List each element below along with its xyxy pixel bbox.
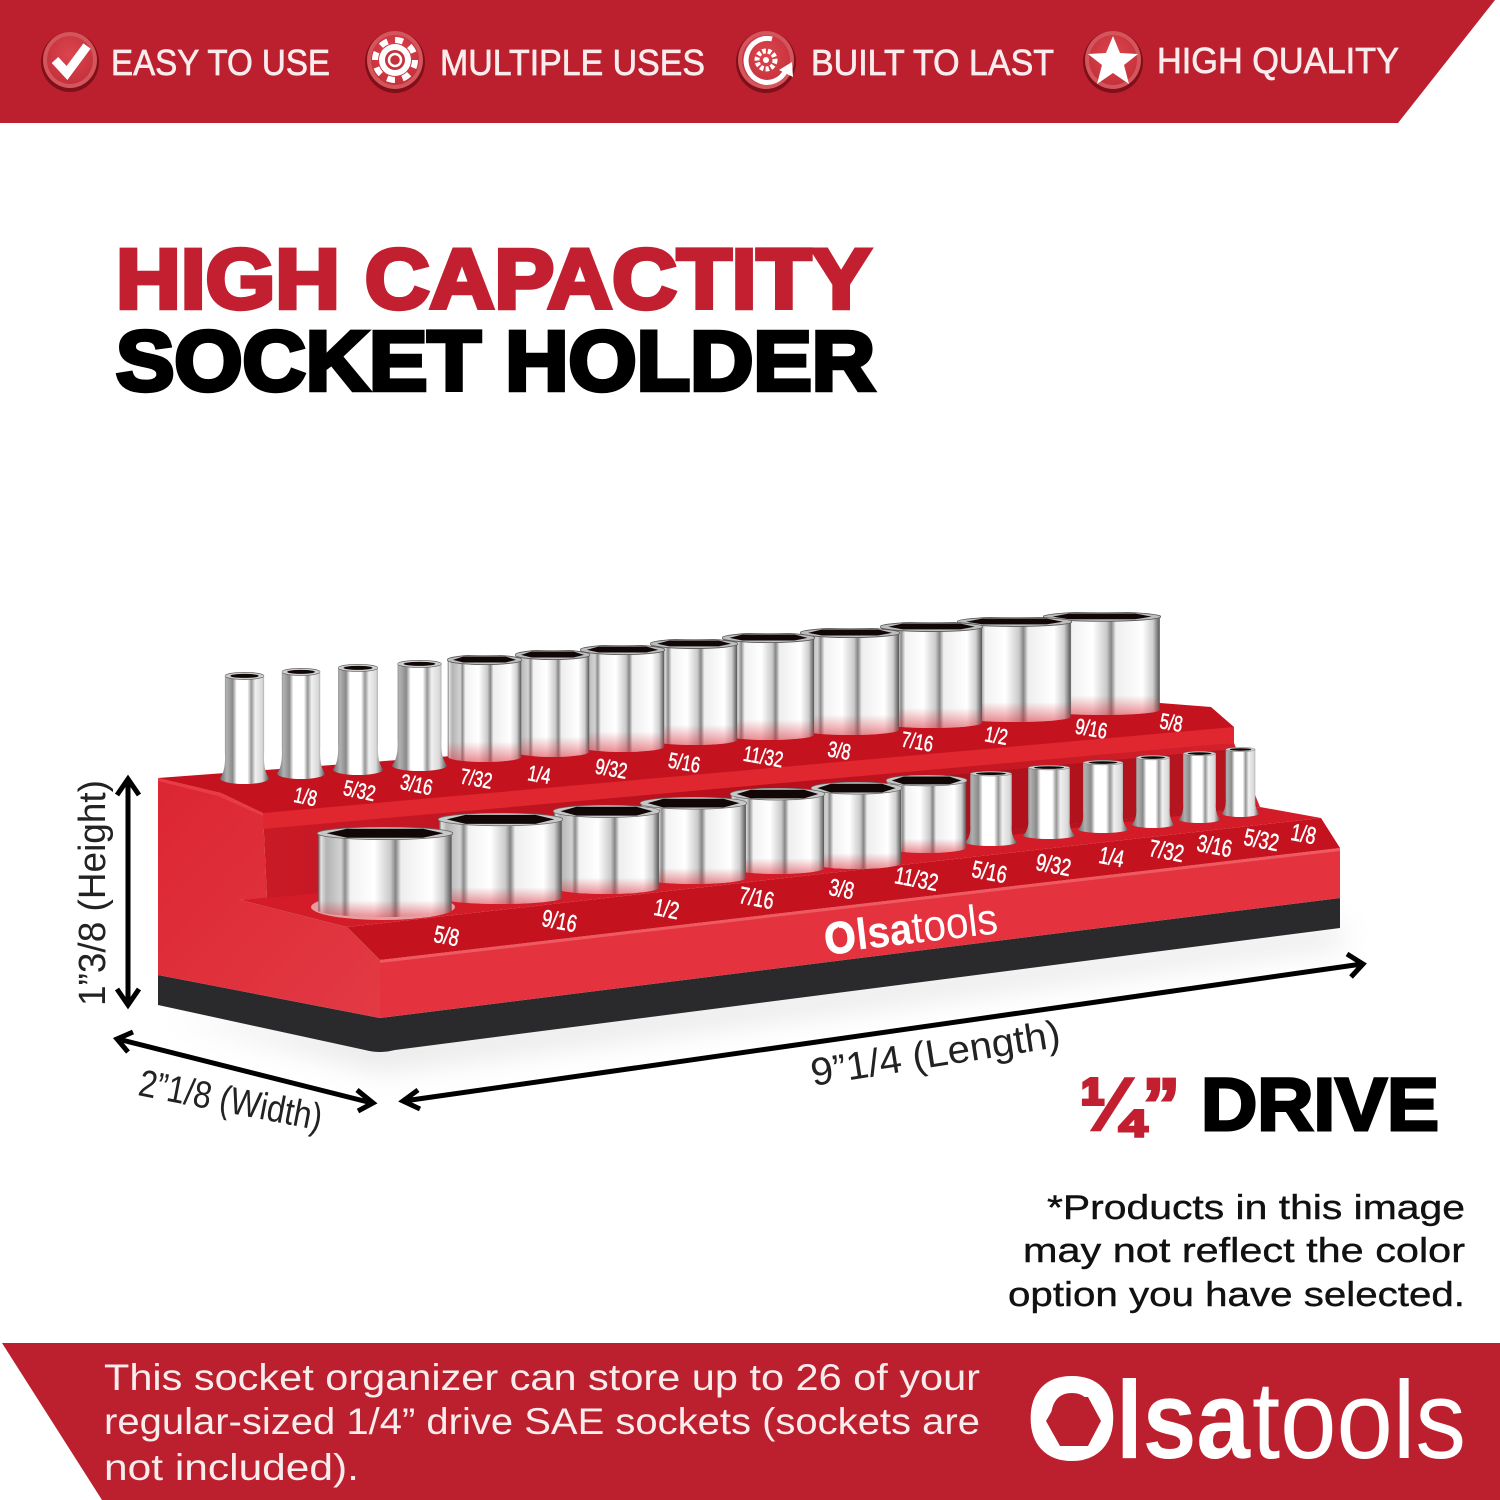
- brand logo: [1028, 1356, 1466, 1483]
- back row size labels: 5/16: [666, 748, 702, 778]
- back row size labels: 7/32: [458, 764, 494, 794]
- disclaimer note: [1008, 1189, 1465, 1314]
- icon: cycle badge: [736, 31, 796, 93]
- front row size labels: 5/32: [1242, 825, 1281, 857]
- front row size labels: 7/32: [1147, 836, 1186, 868]
- dimension: width: [117, 1032, 373, 1139]
- logo on holder: [822, 894, 1000, 964]
- back row size labels: 1/8: [292, 783, 319, 812]
- stepped wall: [263, 743, 1260, 898]
- back row size labels: 5/32: [341, 776, 378, 807]
- logo on holder: tools: [909, 894, 1000, 953]
- description text: regular-sized 1/4” drive SAE sockets (sockets are: [104, 1401, 980, 1442]
- back row size labels: 5/8: [1158, 709, 1185, 738]
- holder left face: [158, 778, 380, 1018]
- front row size labels: 5/8: [432, 922, 461, 952]
- title: SOCKET HOLDER: [116, 314, 875, 408]
- logo on holder: O: [822, 912, 858, 964]
- front row size labels: 11/32: [892, 863, 940, 897]
- front row size labels: 3/8: [827, 875, 856, 905]
- upper deck: [158, 703, 1234, 829]
- back row size labels: [292, 709, 1185, 812]
- back row size labels: 11/32: [741, 742, 785, 773]
- back row sockets: [220, 612, 1161, 784]
- icon: star badge: [1083, 31, 1143, 93]
- front row size labels: 1/4: [1097, 843, 1126, 873]
- drive size heading: [1080, 1063, 1439, 1146]
- back row size labels: 9/16: [1073, 714, 1109, 744]
- disclaimer note: may not reflect the color: [1023, 1232, 1465, 1270]
- lower deck: [240, 807, 1321, 927]
- front row size labels: [432, 820, 1318, 952]
- dimension: width: 2”1/8 (Width): [135, 1063, 326, 1139]
- brand logo: lsa: [1116, 1359, 1251, 1482]
- floor shadow: [170, 925, 1345, 1070]
- icon: check badge: [41, 32, 99, 92]
- holder base: [158, 898, 1340, 1052]
- front row size labels: 9/16: [540, 906, 579, 938]
- back row size labels: 9/32: [593, 754, 629, 784]
- dimension: length: [403, 954, 1363, 1109]
- lower label strip: [347, 818, 1340, 960]
- feature label: built to last: BUILT TO LAST: [811, 42, 1054, 83]
- description text: [104, 1357, 980, 1488]
- dimension: length: 9”1/4 (Length): [808, 1013, 1063, 1095]
- drive size heading: DRIVE: [1201, 1063, 1439, 1146]
- dimension: height: 1”3/8 (Height): [72, 780, 114, 1006]
- disclaimer note: option you have selected.: [1008, 1276, 1465, 1314]
- top banner: [0, 0, 1495, 123]
- brand logo: tools: [1252, 1359, 1466, 1482]
- holder front face: [380, 848, 1340, 1018]
- logo on holder: lsa: [853, 904, 915, 960]
- back row size labels: 3/8: [826, 737, 853, 766]
- front row size labels: 9/32: [1034, 850, 1073, 882]
- back row size labels: 1/4: [526, 761, 553, 790]
- front row size labels: 3/16: [1195, 831, 1234, 863]
- drive size heading: ¼”: [1080, 1063, 1180, 1146]
- feature label: multiple uses: MULTIPLE USES: [440, 42, 705, 83]
- title: HIGH CAPACTITY: [116, 232, 871, 326]
- back row size labels: 7/16: [899, 727, 935, 757]
- front row size labels: 1/8: [1289, 820, 1318, 850]
- icon: gear badge: [365, 31, 425, 93]
- dimension: height: [72, 779, 139, 1006]
- front row size labels: 1/2: [652, 895, 681, 925]
- product: socket holder: [158, 612, 1340, 1052]
- disclaimer note: *Products in this image: [1047, 1189, 1465, 1227]
- front row size labels: 5/16: [970, 857, 1009, 889]
- back row size labels: 3/16: [398, 770, 435, 801]
- feature label: high quality: HIGH QUALITY: [1157, 40, 1399, 81]
- brand logo: O: [1028, 1356, 1116, 1483]
- back row size labels: 1/2: [983, 722, 1010, 751]
- bottom banner: [2, 1343, 1500, 1500]
- description text: not included).: [104, 1447, 359, 1488]
- front row sockets: [311, 747, 1259, 920]
- front row size labels: 7/16: [737, 883, 776, 915]
- description text: This socket organizer can store up to 26 of your: [104, 1357, 980, 1398]
- feature label: easy to use: EASY TO USE: [111, 42, 330, 83]
- title: [116, 232, 875, 408]
